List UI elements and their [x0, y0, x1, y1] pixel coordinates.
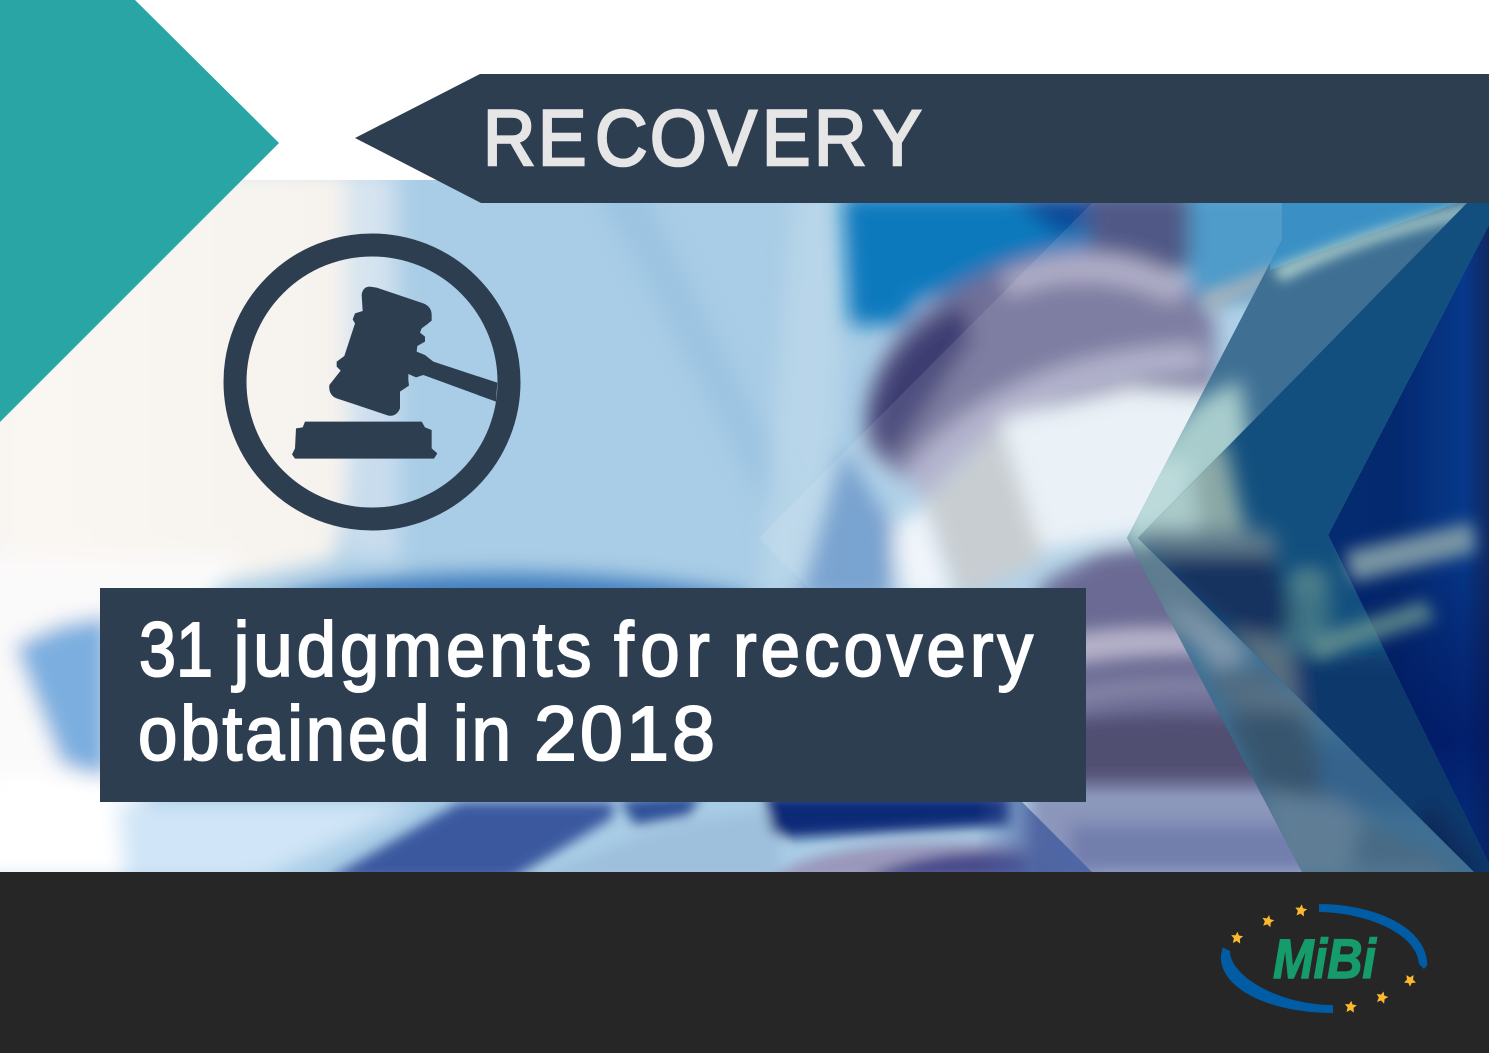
glass panel: navy band — [1320, 220, 1489, 870]
callout text: 31 — [139, 607, 213, 693]
callout text: for — [614, 606, 710, 693]
photo: gavel base stripes — [1030, 263, 1330, 880]
callout text: recovery — [733, 606, 1033, 693]
callout: key figure — [100, 588, 1086, 802]
banner: recovery — [355, 74, 1489, 203]
photo: gavel head — [800, 190, 1489, 800]
callout text — [138, 606, 1033, 777]
heading: RECOVERY: RECOVERY — [483, 94, 922, 183]
photo: blurred bars across the panels — [1294, 522, 1476, 660]
icon: gavel in circle — [235, 245, 509, 519]
glass sheen over gavel — [759, 203, 1302, 872]
photo: lower strip below callout — [326, 802, 1034, 872]
callout text: obtained — [138, 690, 430, 777]
callout text: in — [453, 690, 511, 777]
callout text: 2018 — [534, 691, 715, 777]
callout text: judgments — [232, 606, 592, 693]
background photo: blurred gavel — [0, 170, 1489, 895]
logo: MiBi — [1221, 904, 1427, 1013]
glass panel: pale teal band — [1120, 195, 1489, 880]
photo: soft left side — [0, 170, 850, 880]
logo wordmark: MiBi — [1273, 927, 1377, 990]
glass panel: dark blue band — [1120, 200, 1489, 895]
footer bar — [0, 872, 1489, 1053]
photo: corner left of glass edge — [975, 802, 1092, 872]
teal arrow shape — [0, 0, 279, 422]
